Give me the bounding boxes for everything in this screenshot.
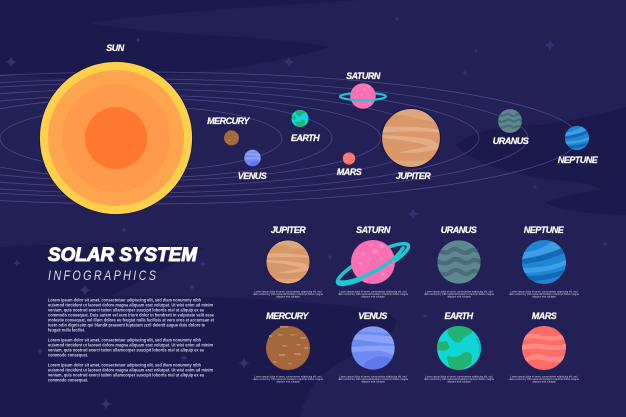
orbits: [0, 72, 578, 204]
card: neptune: diam nonummy nibh euismod tincidunt ut laoreet dolore magna: [509, 293, 579, 296]
card: venus: aliquam erat volutpat: [361, 380, 385, 384]
text block: Lorem ipsum dolor sit amet, consectetuer adipiscing elit, sed diam nonummy nibh: [48, 298, 201, 304]
card: venus: [338, 311, 408, 384]
text block: veniam, quis nostrud exerci tation ullamcorper suscipit lobortis nisl ut aliquip ex ea: [48, 372, 204, 378]
text block: veniam, quis nostrud exerci tation ullamcorper suscipit lobortis nisl ut aliquip ex ea: [48, 348, 204, 354]
label: uranus: URANUS: [493, 136, 529, 146]
card: saturn: diam nonummy nibh euismod tincidunt ut laoreet dolore magna: [338, 293, 408, 296]
card: earth: EARTH: [444, 311, 474, 321]
text block: feugait nulla facilisi.: [48, 328, 85, 334]
text block: euismod tincidunt ut laoreet dolore magna aliquam erat volutpat. Ut wisi enim ad minim: [48, 368, 213, 374]
card: mercury: MERCURY: [266, 311, 309, 321]
card: mars: Lorem ipsum dolor sit amet, consectetuer adipiscing elit, sed: [511, 376, 578, 378]
card: mercury: [253, 311, 323, 384]
card: venus: VENUS: [358, 311, 387, 321]
card: earth: Lorem ipsum dolor sit amet, consectetuer adipiscing elit, sed: [426, 376, 493, 378]
title: SOLAR SYSTEM: [48, 245, 198, 266]
text block: veniam, quis nostrud exerci tation ullamcorper suscipit lobortis nisl ut aliquip ex ea: [48, 308, 204, 314]
planet: uranus orbit: [497, 109, 523, 133]
card: mars: diam nonummy nibh euismod tincidunt ut laoreet dolore magna: [509, 378, 579, 381]
text block: iusto odio dignissim qui blandit praesent luptatum zzril delenit augue duis dolore te: [48, 322, 205, 328]
card: earth: aliquam erat volutpat: [447, 380, 471, 384]
card: venus: diam nonummy nibh euismod tincidunt ut laoreet dolore magna: [338, 378, 408, 381]
card: mars: aliquam erat volutpat: [532, 380, 556, 384]
label: mercury: MERCURY: [207, 116, 250, 126]
label: sun: SUN: [106, 43, 125, 53]
card: uranus: diam nonummy nibh euismod tincidunt ut laoreet dolore magna: [424, 293, 494, 296]
text block: commodo consequat.: [48, 352, 88, 358]
card: uranus: [424, 225, 494, 298]
text block: commodo consequat.: [48, 378, 88, 384]
card: saturn: aliquam erat volutpat: [361, 296, 385, 298]
text block: euismod tincidunt ut laoreet dolore magna aliquam erat volutpat. Ut wisi enim ad minim: [48, 342, 213, 348]
label: earth: EARTH: [291, 133, 320, 143]
card: jupiter: [253, 225, 323, 298]
card: saturn: SATURN: [356, 225, 391, 235]
text block: [48, 298, 214, 384]
card: venus: Lorem ipsum dolor sit amet, consectetuer adipiscing elit, sed: [340, 376, 407, 378]
card: mercury: Lorem ipsum dolor sit amet, consectetuer adipiscing elit, sed: [255, 376, 322, 378]
card: uranus: Lorem ipsum dolor sit amet, consectetuer adipiscing elit, sed: [426, 290, 493, 294]
card: jupiter: JUPITER: [271, 225, 306, 235]
card: mars: [509, 311, 579, 384]
planet: mercury orbit: [224, 131, 239, 145]
card: mars: MARS: [532, 311, 557, 321]
card: uranus: aliquam erat volutpat: [447, 296, 471, 298]
card: neptune: [509, 225, 579, 298]
card: saturn: [333, 225, 413, 298]
card: neptune: aliquam erat volutpat: [532, 296, 556, 298]
card: mercury: aliquam erat volutpat: [276, 380, 300, 384]
label: jupiter: JUPITER: [396, 171, 431, 181]
planet: jupiter orbit: [382, 109, 440, 167]
text block: Lorem ipsum dolor sit amet, consectetuer adipiscing elit, sed diam nonummy nibh: [48, 338, 201, 344]
card: uranus: URANUS: [441, 225, 477, 235]
card: neptune: Lorem ipsum dolor sit amet, consectetuer adipiscing elit, sed: [511, 290, 578, 294]
sun: [40, 62, 192, 214]
label: saturn: SATURN: [346, 71, 381, 81]
card: jupiter: diam nonummy nibh euismod tincidunt ut laoreet dolore magna: [253, 293, 323, 296]
card: earth: diam nonummy nibh euismod tincidunt ut laoreet dolore magna: [424, 378, 494, 381]
label: neptune: NEPTUNE: [558, 155, 599, 165]
planet: saturn orbit: [340, 83, 386, 109]
label: venus: VENUS: [238, 171, 267, 181]
label: mars: MARS: [337, 167, 362, 177]
planet: neptune orbit: [565, 126, 589, 150]
card: jupiter: aliquam erat volutpat: [276, 296, 300, 298]
card: saturn: Lorem ipsum dolor sit amet, consectetuer adipiscing elit, sed: [340, 290, 407, 294]
planet: earth orbit: [291, 110, 309, 127]
card: jupiter: Lorem ipsum dolor sit amet, consectetuer adipiscing elit, sed: [255, 290, 322, 294]
card: mercury: diam nonummy nibh euismod tincidunt ut laoreet dolore magna: [253, 378, 323, 381]
text block: euismod tincidunt ut laoreet dolore magna aliquam erat volutpat. Ut wisi enim ad minim: [48, 302, 213, 308]
text block: commodo consequat. Duis autem vel eum iriure dolor in hendrerit in vulputate velit esse: [48, 312, 214, 318]
text block: molestie consequat, vel illum dolore eu feugiat nulla facilisis at vero eros et accumsan et: [48, 318, 214, 324]
text block: Lorem ipsum dolor sit amet, consectetuer adipiscing elit, sed diam nonummy nibh: [48, 362, 201, 368]
planet: venus orbit: [244, 150, 261, 166]
card: neptune: NEPTUNE: [524, 225, 565, 235]
subtitle: INFOGRAPHICS: [48, 268, 157, 283]
card: earth: [424, 311, 494, 384]
planet: mars orbit: [343, 152, 355, 165]
